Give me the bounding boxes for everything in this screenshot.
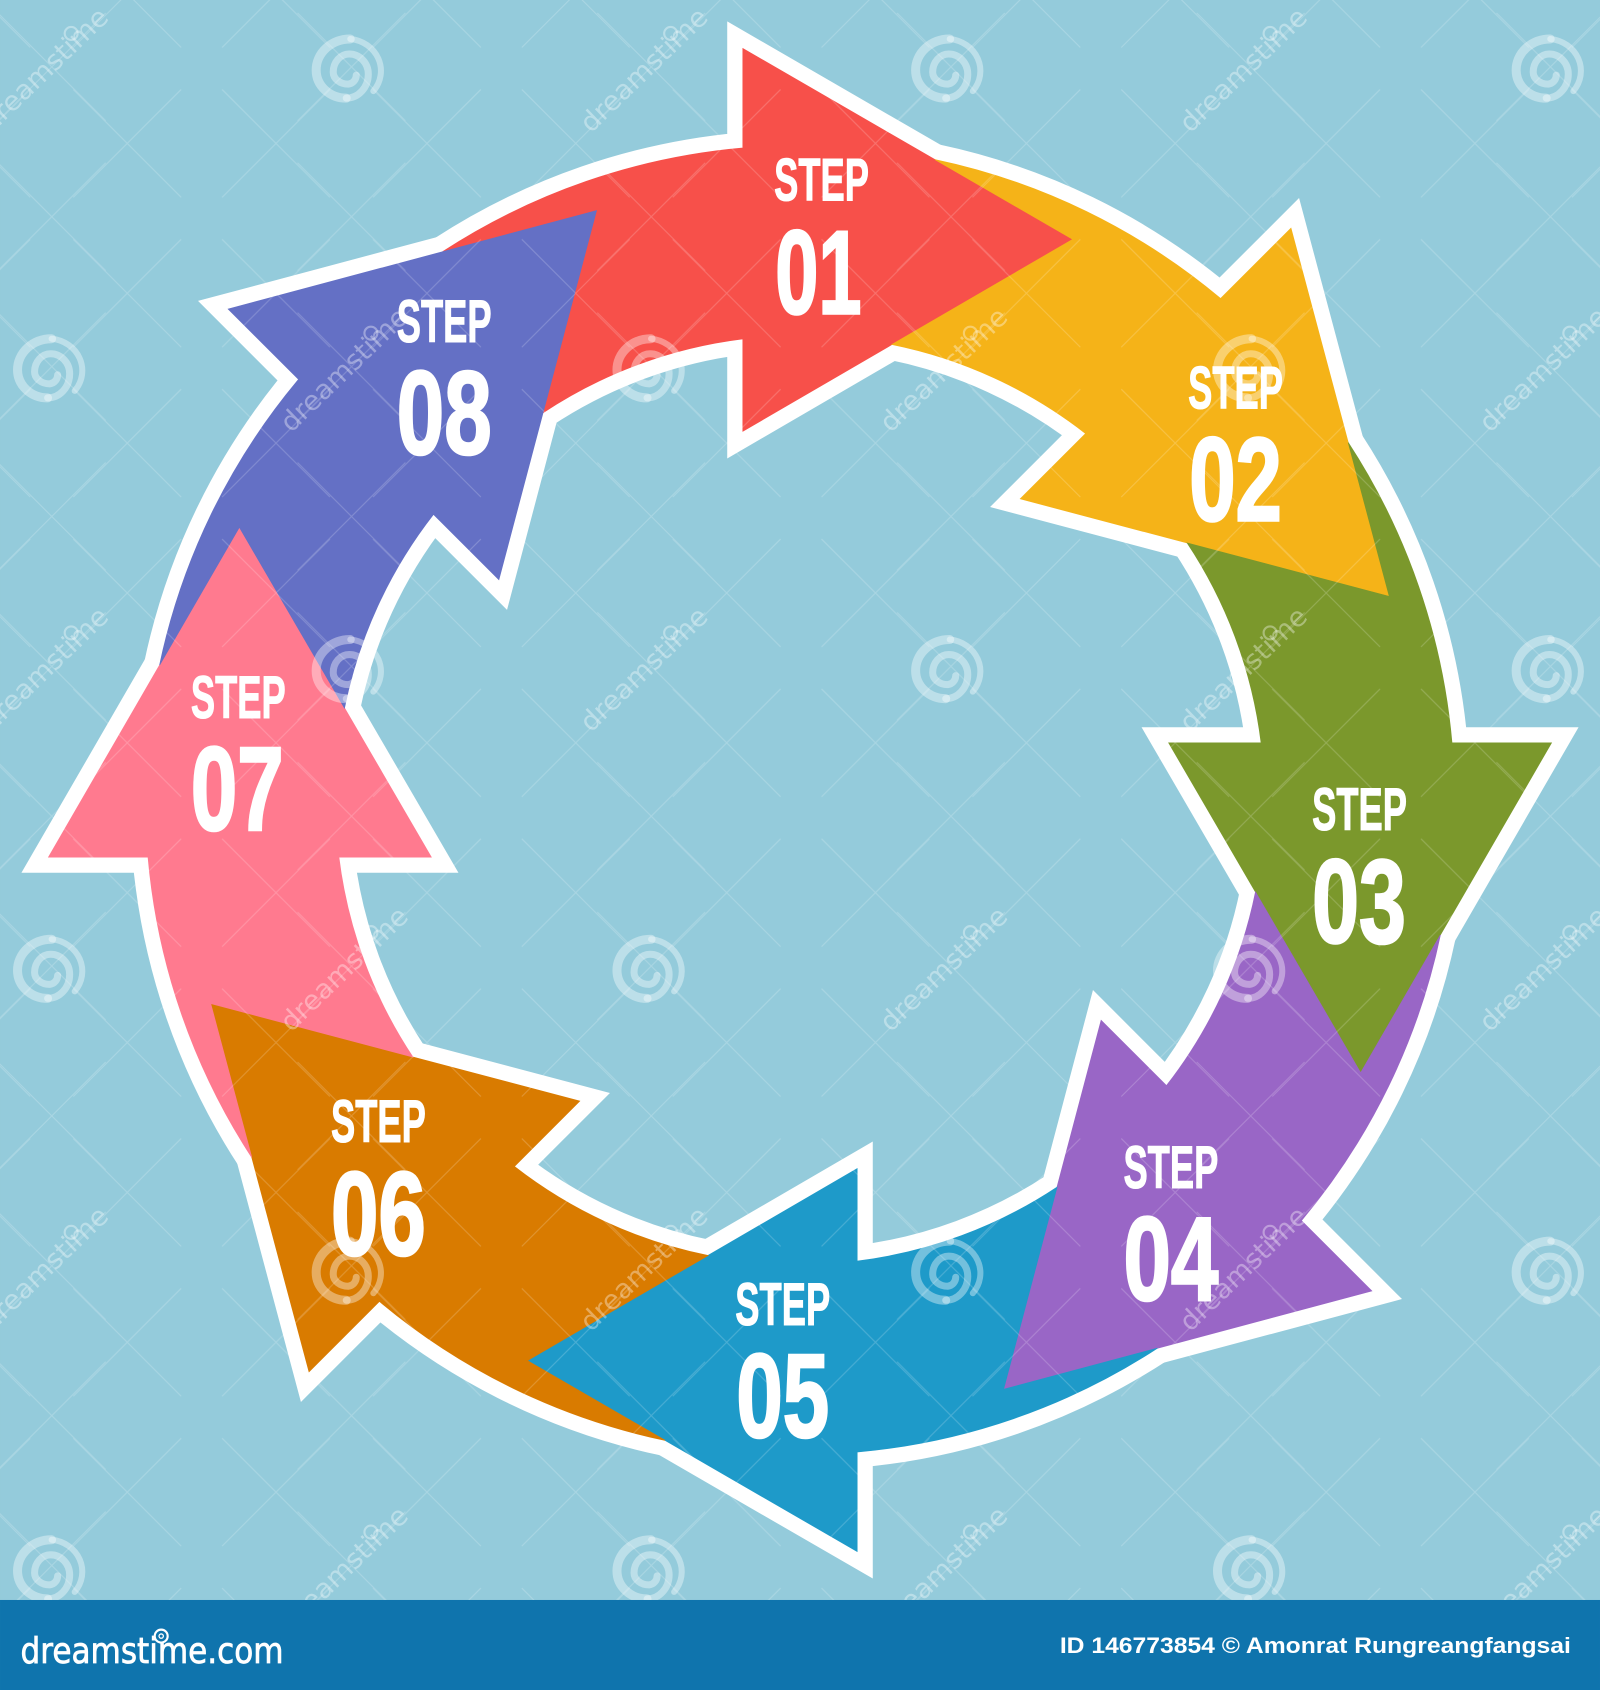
footer logo: dreamstime.com <box>20 1631 284 1672</box>
arrow: step 01: STEP <box>774 146 869 214</box>
arrow: step 02: STEP <box>1188 354 1283 422</box>
arrow: step 06: 06 <box>331 1149 426 1281</box>
arrow: step 07: 07 <box>191 724 284 856</box>
watermark text: dreamstime <box>274 1500 415 1637</box>
watermark text: dreamstime <box>574 601 714 738</box>
arrow: step 08 <box>16 76 732 792</box>
arrow: step 01: 01 <box>775 208 861 340</box>
arrow: step 07 <box>49 527 431 1157</box>
arrow: step 03: 03 <box>1312 836 1406 968</box>
watermark text: dreamstime <box>1174 1201 1314 1338</box>
footer bar <box>0 1600 1600 1690</box>
watermark text: dreamstime <box>274 901 415 1038</box>
arrow: step 07: STEP <box>191 663 286 731</box>
arrow: step 05: 05 <box>736 1331 829 1463</box>
arrow: step 04: STEP <box>1123 1133 1218 1201</box>
watermark text: dreamstime <box>1174 601 1314 738</box>
arrow: step 03 <box>1169 443 1551 1073</box>
watermark text: dreamstime <box>874 901 1014 1038</box>
arrow: step 04 <box>868 808 1584 1524</box>
watermark text: dreamstime <box>574 2 714 139</box>
arrow: step 08: 08 <box>397 348 492 480</box>
arrow: step 03: STEP <box>1312 775 1407 843</box>
watermark text: dreamstime <box>574 1201 714 1338</box>
arrow: step 05: STEP <box>735 1270 830 1338</box>
arrow: step 06: STEP <box>331 1087 426 1155</box>
arrow: step 06 <box>76 868 792 1584</box>
arrow: step 01 <box>443 49 1073 431</box>
arrow: step 02 <box>808 16 1524 732</box>
arrow: step 05 <box>527 1169 1157 1551</box>
watermark text: dreamstime <box>274 302 415 438</box>
arrow: step 08: STEP <box>397 287 492 355</box>
watermark text: dreamstime <box>1174 2 1314 139</box>
arrow: step 04: 04 <box>1123 1194 1218 1326</box>
arrow: step 02: 02 <box>1189 415 1282 547</box>
watermark text: dreamstime <box>874 1500 1014 1637</box>
watermark text: dreamstime <box>874 302 1014 438</box>
footer credit: ID 146773854 © Amonrat Rungreangfangsai <box>1060 1633 1571 1658</box>
